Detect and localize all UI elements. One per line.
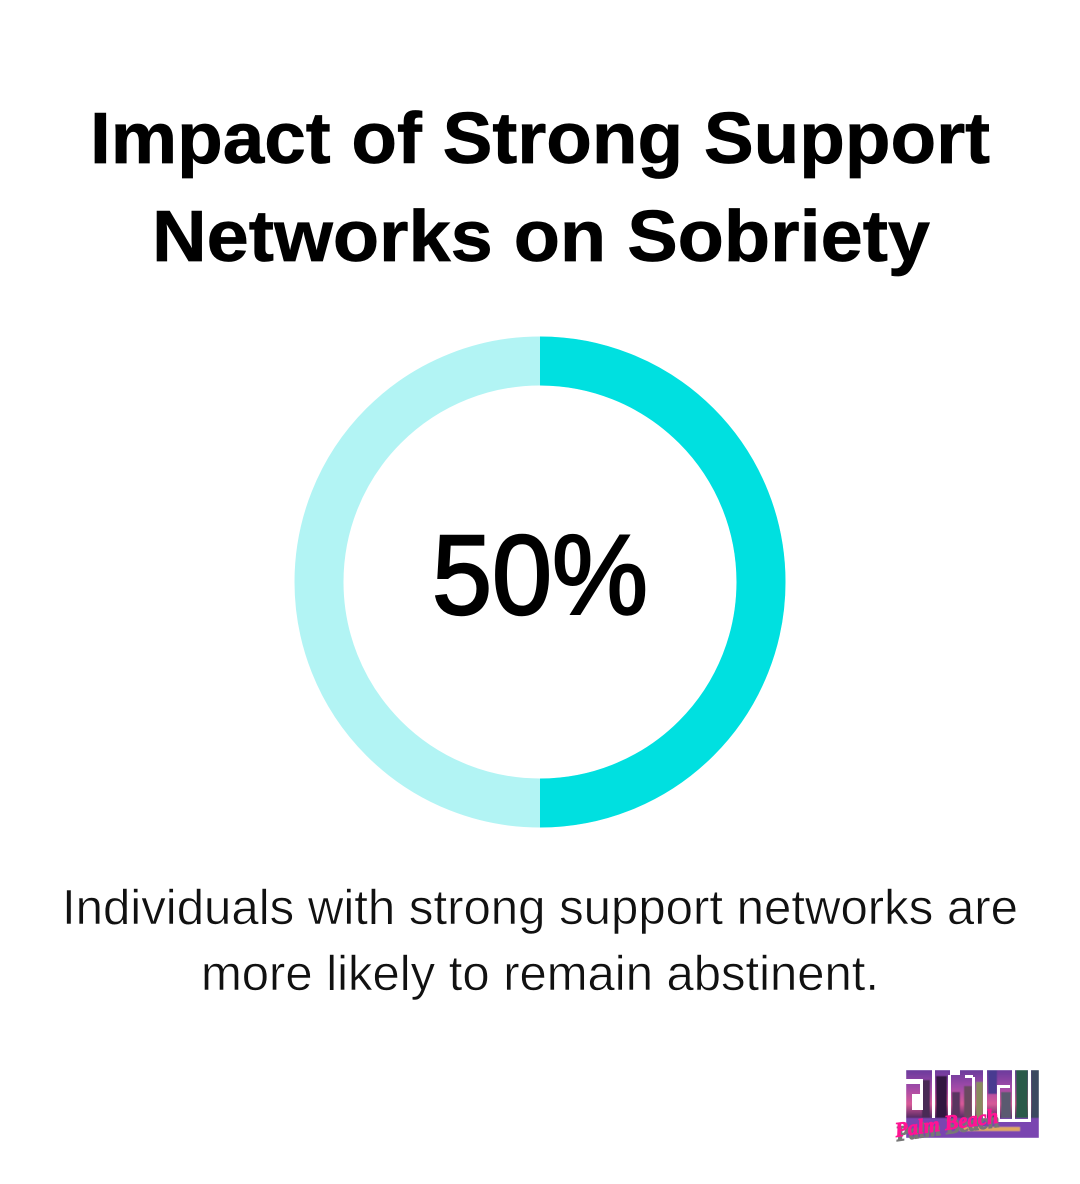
logo city image <box>906 1070 1039 1138</box>
donut value arc <box>540 361 761 803</box>
logo script: Palm Beach: Palm Beach <box>893 1108 1001 1146</box>
logo script: Palm Beach: Palm Beach <box>892 1104 1000 1142</box>
logo white letter gaps <box>906 1066 1031 1122</box>
description text: Individuals with strong support networks are <box>62 881 1018 935</box>
description text: more likely to remain abstinent. <box>201 947 879 1001</box>
description text <box>62 881 1018 1001</box>
logo: amity Palm Beach <box>896 1070 1039 1142</box>
donut chart: 50% <box>319 361 761 803</box>
title: Impact of Strong Support <box>90 99 990 179</box>
title: Networks on Sobriety <box>152 197 930 277</box>
title <box>90 99 990 277</box>
donut track <box>319 361 761 803</box>
center percentage: 50% <box>432 512 648 638</box>
